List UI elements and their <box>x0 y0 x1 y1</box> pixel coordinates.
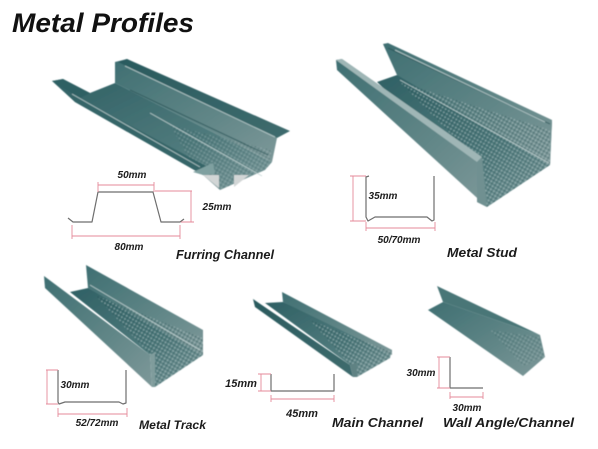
panel: main channel <box>225 292 423 430</box>
furring channel bottom dimension: 80mm <box>115 242 144 253</box>
metal stud profile diagram <box>350 176 435 231</box>
metal track profile diagram <box>46 370 127 417</box>
main channel label: Main Channel <box>332 415 423 430</box>
metal track label: Metal Track <box>139 420 207 432</box>
metal stud width dimension: 50/70mm <box>378 235 421 246</box>
metal stud height dimension: 35mm <box>369 191 398 202</box>
panel: metal stud <box>336 43 552 260</box>
main channel product image <box>253 292 392 377</box>
wall angle product image <box>428 286 545 376</box>
wall angle height dimension: 30mm <box>407 368 436 379</box>
panel: metal track <box>44 265 207 432</box>
metal stud label: Metal Stud <box>447 245 518 260</box>
metal track width dimension: 52/72mm <box>76 418 119 429</box>
furring channel profile diagram <box>68 182 194 239</box>
wall angle profile diagram <box>437 357 483 399</box>
main channel height dimension: 15mm <box>225 378 257 390</box>
title: Metal Profiles <box>12 8 194 38</box>
metal track product image <box>44 265 203 387</box>
wall angle label: Wall Angle/Channel <box>443 415 574 430</box>
furring channel top dimension: 50mm <box>118 170 147 181</box>
panel: wall angle <box>407 286 574 430</box>
metal stud product image <box>336 43 552 207</box>
main channel width dimension: 45mm <box>285 408 318 420</box>
metal track height dimension: 30mm <box>61 380 90 391</box>
furring channel product image <box>52 59 290 190</box>
panel: furring channel <box>52 59 290 262</box>
wall angle width dimension: 30mm <box>453 403 482 414</box>
furring channel height dimension: 25mm <box>202 202 232 213</box>
furring channel label: Furring Channel <box>176 247 274 262</box>
main channel profile diagram <box>258 374 334 402</box>
